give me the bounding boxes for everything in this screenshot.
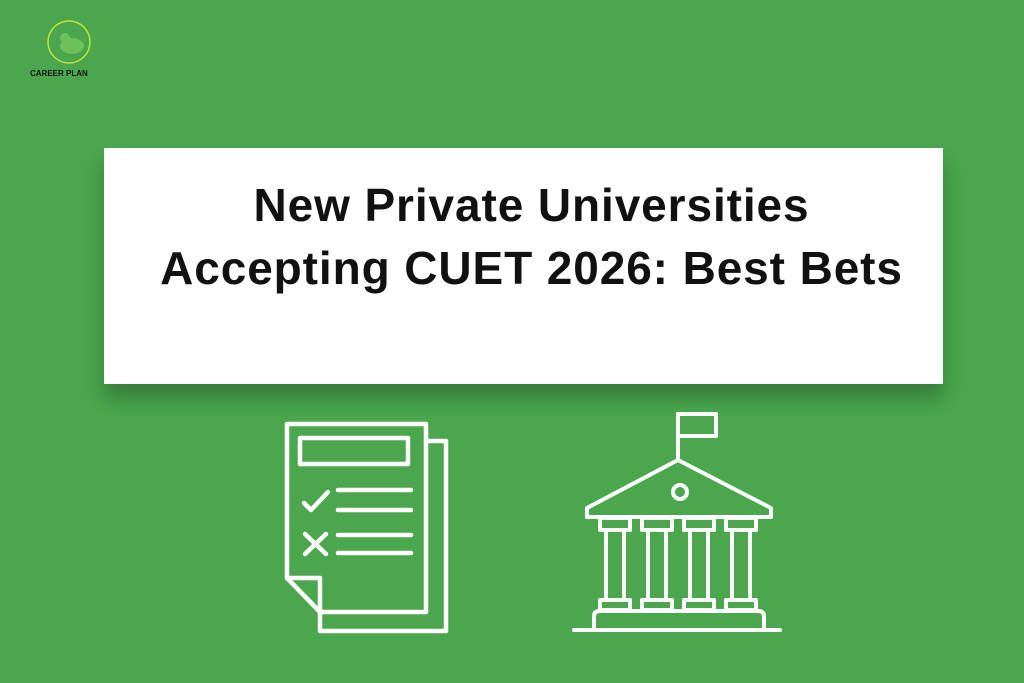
title: Accepting CUET 2026: Best Bets: [160, 242, 903, 294]
logo: [30, 20, 91, 78]
title: [160, 179, 903, 294]
title: New Private Universities: [254, 179, 809, 231]
logo: CAREER PLAN: [30, 69, 88, 78]
title box: [104, 148, 943, 384]
